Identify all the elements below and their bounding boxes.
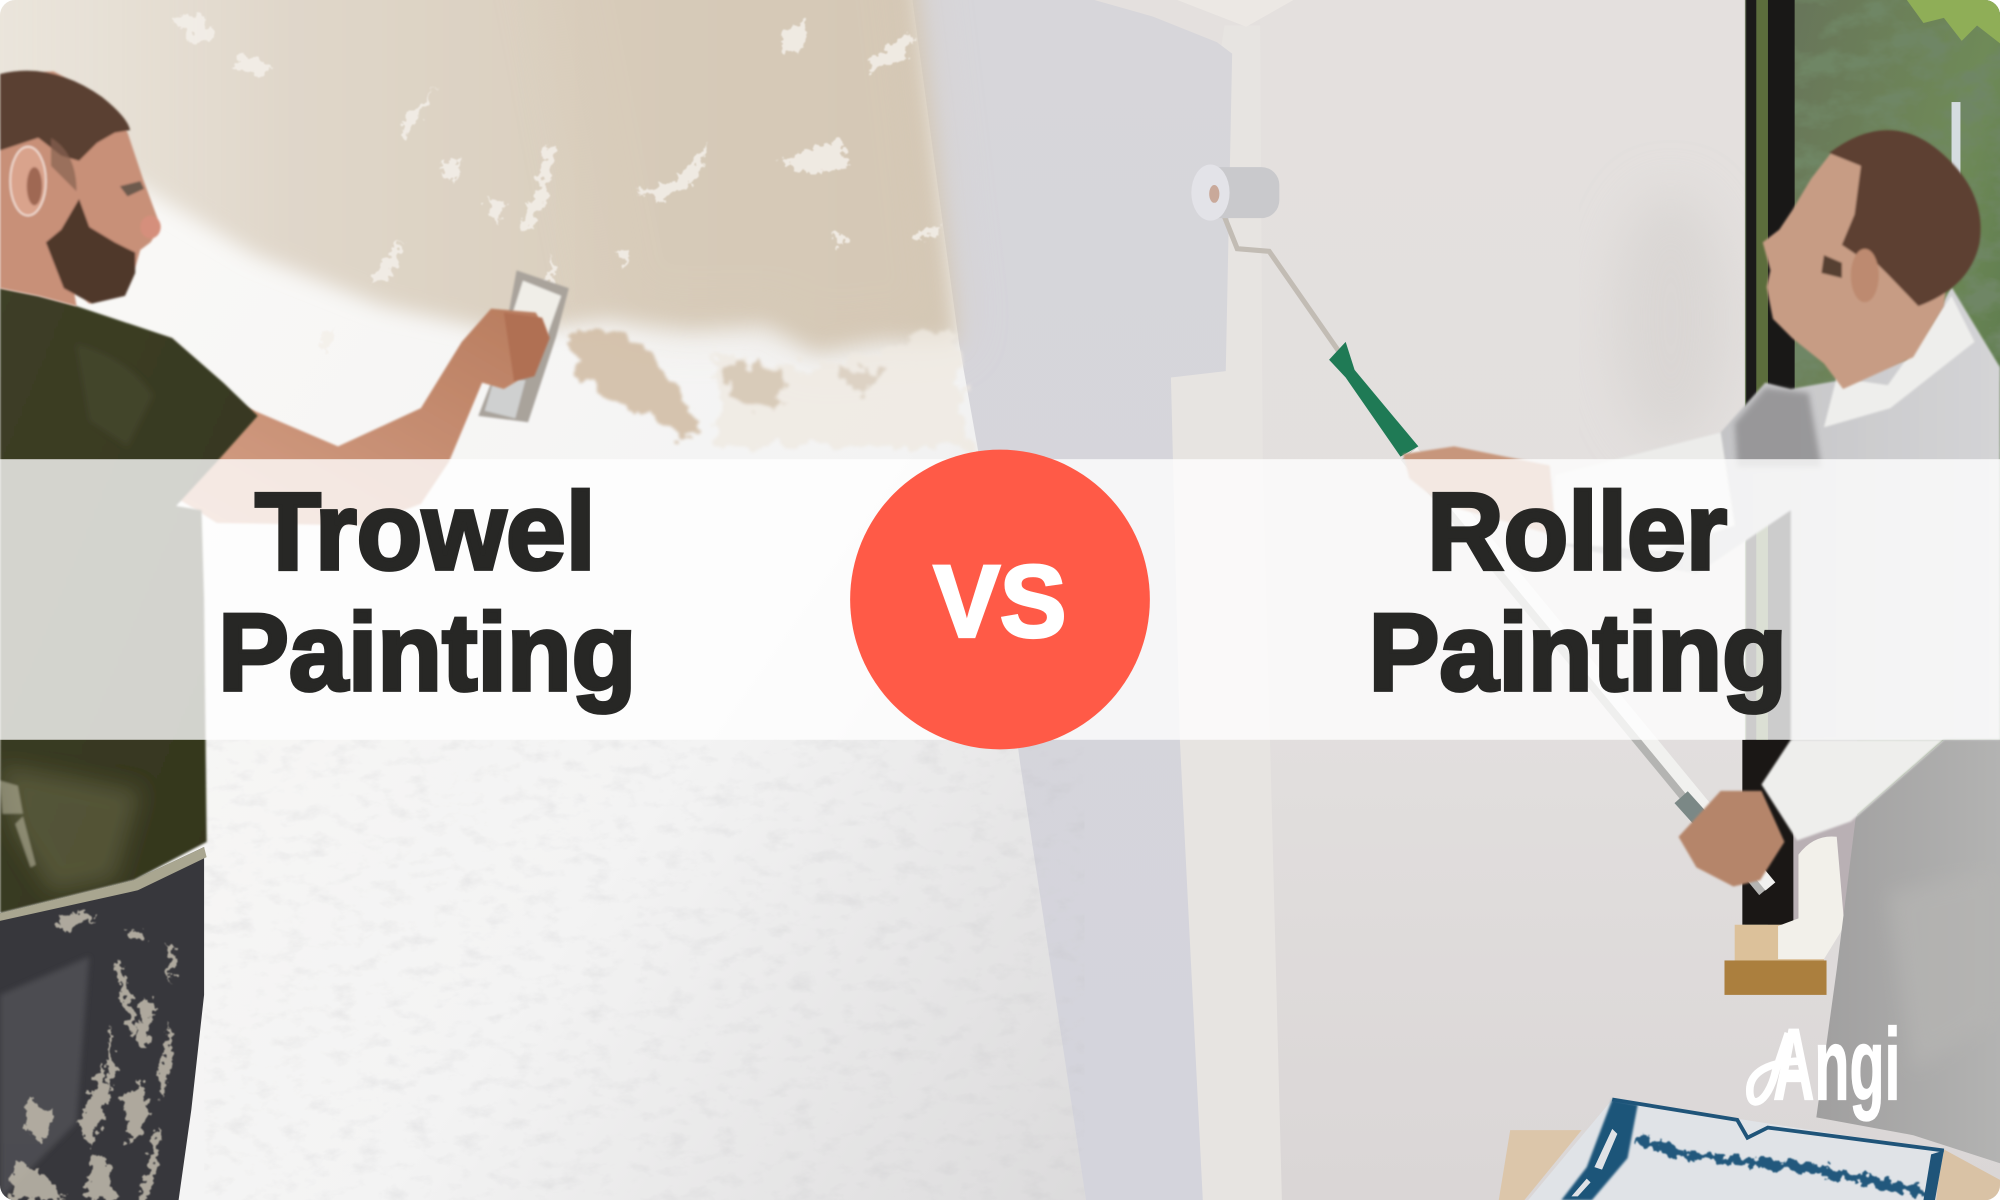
man on left: shirt bbox=[0, 288, 258, 913]
cardboard under paint tray bbox=[1499, 1130, 2000, 1200]
window sill and white ornament bbox=[1724, 836, 1844, 995]
VS badge: VS bbox=[934, 544, 1066, 658]
Angi logo: Angi bbox=[1773, 1007, 1901, 1121]
man on left: head bbox=[0, 71, 161, 306]
background: right plain wall bbox=[1095, 0, 2000, 1200]
background: blue-grey painted wall section bbox=[893, 0, 1232, 1200]
man on right: trousers bbox=[1816, 740, 2000, 1163]
trowel bbox=[478, 270, 569, 422]
right title: Roller Painting: Roller bbox=[1427, 471, 1727, 593]
man on right: head bbox=[1763, 130, 1981, 389]
left title: Trowel Painting: Painting bbox=[218, 592, 636, 714]
plaster flecks on wall bbox=[172, 13, 941, 355]
VS badge bbox=[850, 450, 1150, 749]
left title: Trowel Painting bbox=[218, 471, 636, 714]
Angi logo bbox=[1746, 1024, 1897, 1122]
man on right: hands bbox=[1403, 446, 1784, 886]
man on left: jeans bbox=[0, 847, 207, 1200]
roller tool bbox=[1191, 165, 1770, 889]
translucent title band bbox=[0, 459, 2000, 740]
ceiling corner bbox=[1191, 4, 1282, 24]
man on right: protective suit bbox=[1550, 287, 2000, 841]
plaster edge band with patches bbox=[571, 329, 967, 446]
man on left: arm and hand bbox=[166, 309, 550, 526]
corner light stripe bbox=[1187, 882, 1282, 1200]
background: left plastered wall bbox=[0, 0, 1088, 1200]
right title: Roller Painting bbox=[1369, 471, 1787, 714]
background: window with foliage bbox=[1742, 0, 2000, 931]
paint tray bbox=[1528, 1099, 1944, 1200]
right title: Roller Painting: Painting bbox=[1369, 592, 1787, 714]
left title: Trowel Painting: Trowel bbox=[255, 471, 596, 593]
